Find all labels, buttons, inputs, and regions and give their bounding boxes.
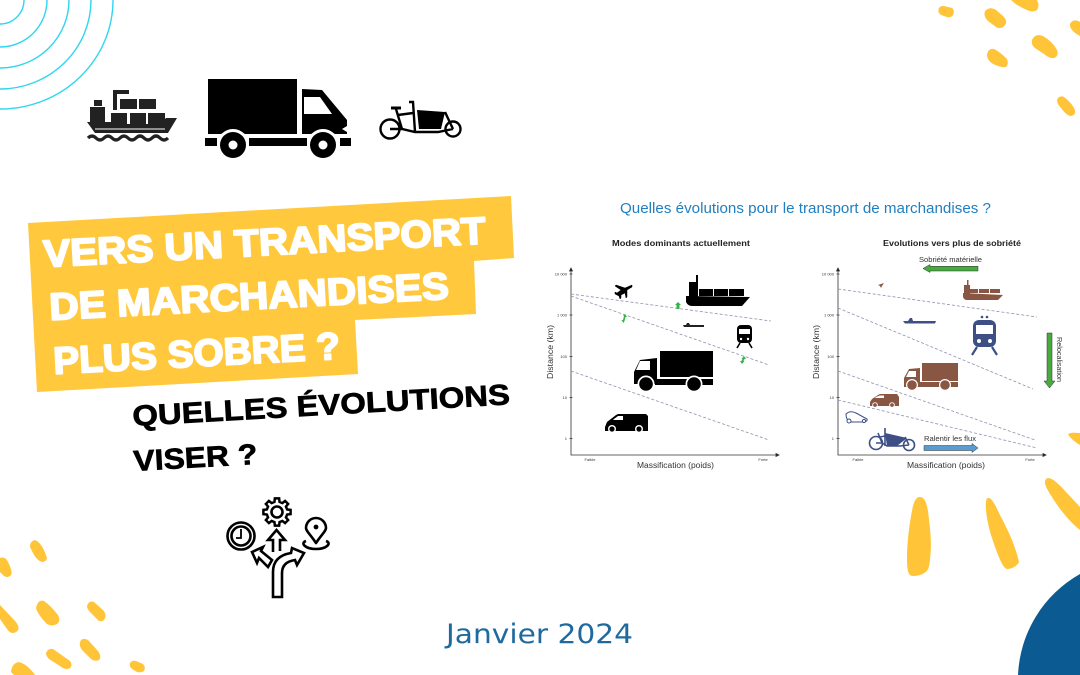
axis tick labels: left chart: 100	[560, 354, 568, 359]
axes: left chart	[570, 268, 779, 456]
chart: évolutions vers plus de sobriété	[812, 238, 1062, 470]
heading: left chart: Modes dominants actuellement	[612, 238, 750, 248]
axis labels: left chart: Forte	[758, 457, 768, 462]
axis tick labels: left chart: 10	[563, 395, 568, 400]
arrow: relocalisation	[1044, 333, 1062, 388]
icon: brown van	[870, 394, 899, 408]
decorative blue circle bottom right	[1018, 574, 1080, 675]
axis labels: right chart: Faible	[853, 457, 864, 462]
icon: van	[605, 414, 648, 433]
heading: right chart: Evolutions vers plus de sobriété	[883, 238, 1021, 248]
axis labels: right chart	[812, 325, 1035, 470]
chart title: Quelles évolutions pour le transport de marchandises ?	[620, 201, 991, 217]
axis labels: left chart: Distance (km)	[546, 325, 555, 379]
axis tick labels: left chart: 1 000	[557, 312, 568, 318]
icon: green arrows	[622, 302, 746, 364]
title: vers un transport de marchandises plus sobre	[42, 210, 487, 383]
axis labels: right chart: Massification (poids)	[907, 461, 985, 470]
icon: truck	[634, 351, 713, 392]
icon: crossroads with clock, gear and pin	[228, 498, 329, 597]
axis tick labels: left chart	[555, 272, 568, 441]
decorative yellow dashes top right	[938, 0, 1080, 116]
subtitle: quelles évolutions viser: VISER ?	[133, 439, 258, 478]
axis tick labels: left chart: 10 000	[555, 272, 568, 276]
icon: small ship	[683, 323, 704, 327]
dashed boundaries: right chart	[838, 289, 1037, 448]
axis labels: left chart	[546, 325, 768, 470]
axis tick labels: right chart: 1	[832, 436, 835, 441]
subtitle: quelles évolutions viser	[131, 377, 511, 478]
icon: tiny plane	[878, 283, 884, 288]
arrow: sobriété matérielle	[919, 257, 982, 272]
icon: container ship	[686, 275, 750, 306]
axis tick labels: right chart	[822, 272, 835, 441]
decorative yellow dashes bottom left	[0, 540, 145, 675]
icon: brown truck	[904, 363, 958, 391]
axes: right chart	[836, 268, 1046, 456]
arrow: ralentir les flux: Ralentir les flux	[924, 436, 977, 443]
axis labels: right chart: Distance (km)	[812, 325, 821, 379]
icon: navy ship	[903, 318, 936, 324]
icon: velomobile	[846, 412, 867, 423]
axis tick labels: right chart: 100	[827, 354, 835, 359]
icon: navy train	[972, 316, 997, 355]
icon: cargo bike	[380, 102, 460, 138]
subtitle: quelles évolutions viser: QUELLES ÉVOLUTIONS	[131, 377, 511, 433]
arrow: ralentir les flux	[924, 436, 978, 452]
axis tick labels: right chart: 10	[830, 395, 835, 400]
icon: navy cargo bike	[870, 428, 914, 450]
title: vers un transport de marchandises plus sobre: PLUS SOBRE ?	[52, 326, 341, 383]
decorative yellow petals bottom right	[907, 433, 1080, 576]
icon: container ship	[87, 90, 177, 140]
axis tick labels: right chart: 1 000	[824, 312, 835, 318]
axis tick labels: right chart: 10 000	[822, 272, 835, 276]
axis labels: right chart: Forte	[1025, 457, 1035, 462]
icon: train	[737, 325, 752, 348]
panel: yellow title banner	[28, 196, 514, 392]
axis labels: left chart: Faible	[585, 457, 596, 462]
icon: brown container ship	[963, 280, 1003, 300]
dashed boundaries: left chart	[571, 294, 771, 440]
axis tick labels: left chart: 1	[565, 436, 568, 441]
axis labels: left chart: Massification (poids)	[637, 461, 714, 470]
arrow: sobriété matérielle: Sobriété matérielle	[919, 257, 982, 264]
arrow: relocalisation: Relocalisation	[1055, 337, 1062, 382]
title: vers un transport de marchandises plus sobre: DE MARCHANDISES	[48, 266, 450, 329]
icon: plane	[615, 285, 632, 299]
title: vers un transport de marchandises plus sobre: VERS UN TRANSPORT	[42, 210, 487, 276]
date: janvier 2024: Janvier 2024	[444, 619, 633, 650]
decorative cyan arcs top left	[0, 0, 113, 109]
chart: modes dominants actuellement	[546, 238, 779, 470]
icon: delivery truck	[205, 79, 351, 161]
